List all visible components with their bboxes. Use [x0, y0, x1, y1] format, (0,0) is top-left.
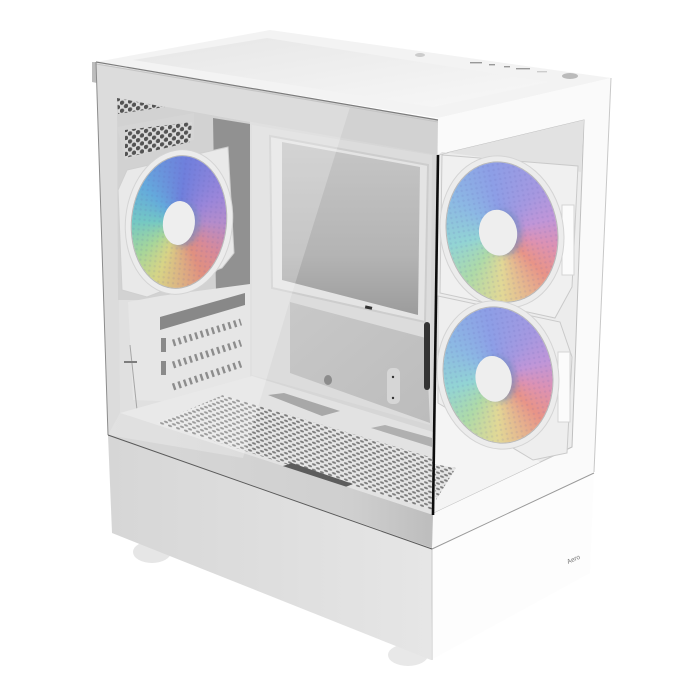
interior left compartment [117, 98, 438, 515]
feet [133, 541, 428, 666]
floor cutouts [268, 393, 432, 488]
left glass frame [92, 62, 438, 548]
rear fan hub [161, 199, 197, 247]
base shroud: left side [108, 435, 432, 660]
glass reflection [96, 63, 350, 458]
front panel frame [432, 78, 611, 548]
rear I/O expansion slots [124, 284, 250, 410]
base shroud: front side [431, 472, 594, 660]
perforated floor mesh [157, 395, 433, 510]
front window interior [433, 120, 584, 513]
glass corner edge [424, 155, 438, 515]
front top RGB fan [436, 154, 568, 310]
glass lower band [108, 413, 433, 548]
case floor [120, 376, 433, 515]
front bottom RGB fan [433, 299, 563, 451]
rear fan frame [118, 147, 234, 297]
front top fan hub [475, 207, 521, 259]
logo: Aero [566, 554, 582, 566]
lower tray panel [290, 302, 430, 423]
front fan frames [438, 155, 578, 460]
top panel [96, 30, 611, 118]
motherboard tray [252, 125, 432, 425]
rear RGB fan [125, 151, 233, 293]
front bottom fan hub [472, 353, 515, 405]
top edge lines of left glass [96, 62, 438, 549]
